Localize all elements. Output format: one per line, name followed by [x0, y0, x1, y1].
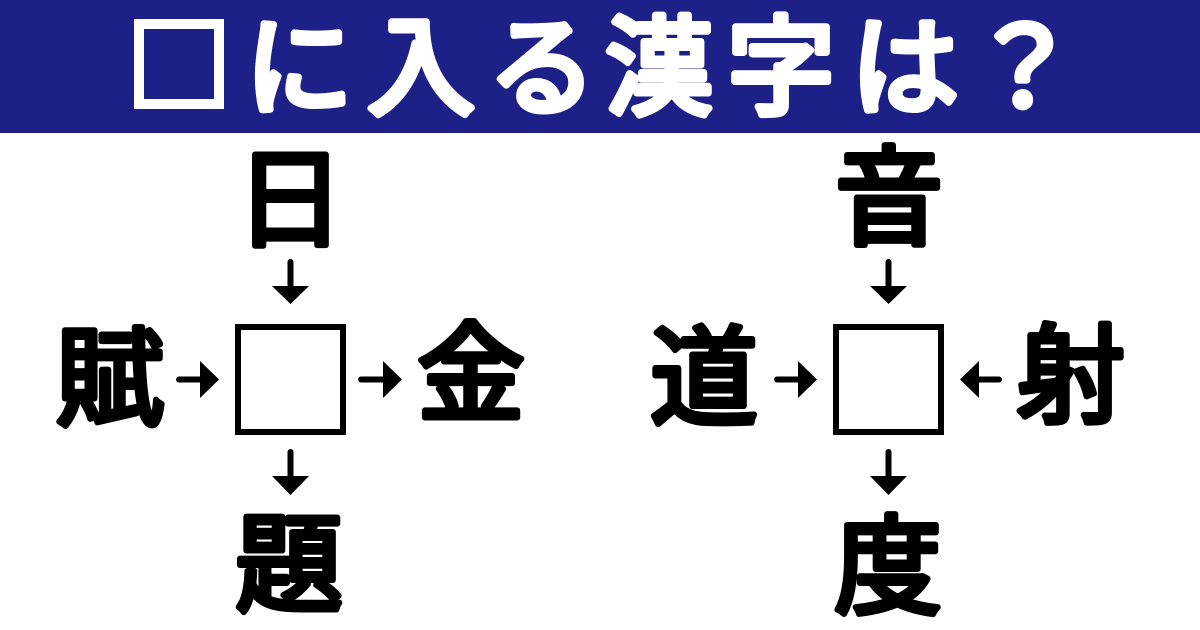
kanji top: 音 [835, 138, 943, 259]
kanji left: 道 [650, 318, 758, 439]
left puzzle [56, 140, 525, 626]
kanji right: 射 [1017, 316, 1125, 437]
kanji bottom: 度 [834, 507, 942, 628]
arrow: bottom down [272, 452, 309, 495]
answer box [238, 327, 343, 432]
right puzzle [650, 138, 1125, 628]
arrow: left to box [777, 361, 817, 398]
arrow: left to box [179, 361, 219, 398]
kanji bottom: 題 [235, 505, 343, 626]
arrow: right to box [960, 361, 999, 398]
arrow: top down [272, 262, 309, 304]
kanji left: 賦 [56, 319, 164, 440]
kanji right: 金 [417, 314, 525, 435]
title banner [0, 0, 1200, 133]
arrow: bottom down [870, 452, 907, 495]
title text: に入る漢字は？ [245, 8, 1078, 129]
arrow: box to right [361, 361, 402, 398]
arrow: top down [870, 262, 907, 304]
title empty box [139, 24, 219, 104]
kanji top: 日 [236, 140, 344, 261]
answer box [836, 327, 941, 432]
